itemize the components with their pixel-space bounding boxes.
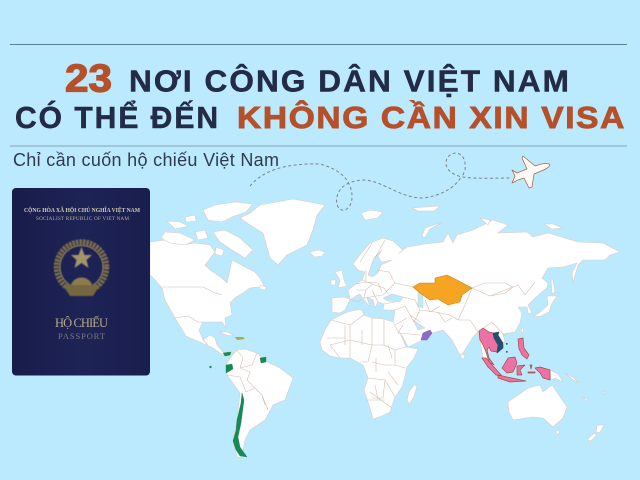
South America	[226, 349, 293, 458]
passport subheading: SOCIALIST REPUBLIC OF VIET NAM	[36, 216, 129, 222]
Baltic Sea	[368, 250, 392, 277]
Borneo	[502, 357, 517, 373]
Sulawesi	[517, 365, 532, 375]
Japan	[533, 296, 557, 317]
Black Sea	[383, 294, 403, 302]
Greenland	[240, 199, 325, 265]
subtitle: Chỉ cần cuốn hộ chiếu Việt Nam	[13, 150, 279, 170]
world map	[150, 199, 620, 458]
Ecuador	[226, 364, 233, 373]
Dominican Republic and Haiti	[235, 337, 245, 340]
Australia	[508, 385, 567, 427]
Caspian Sea	[418, 292, 423, 308]
West Papua and Moluccas	[528, 367, 550, 380]
Sumatra and Java	[482, 358, 526, 382]
Vietnam islands	[506, 343, 508, 353]
Persian Gulf	[413, 320, 425, 330]
title: first line: NƠI CÔNG DÂN VIỆT NAM	[129, 62, 571, 98]
Madagascar	[407, 385, 417, 404]
North and Central America	[150, 240, 265, 356]
Canadian Arctic islands	[161, 202, 266, 290]
Africa	[320, 310, 418, 419]
passport emblem	[56, 242, 106, 296]
Galapagos	[210, 366, 212, 368]
passport	[12, 188, 150, 376]
Arctic islands of Russia	[361, 206, 562, 238]
Cuba	[220, 332, 234, 336]
highlighted countries: Latin America	[210, 352, 266, 457]
Sakhalin	[551, 279, 555, 294]
Tasmania	[555, 431, 560, 435]
Eurasia	[332, 220, 620, 367]
title: number 23: 23	[65, 58, 112, 100]
passport cover	[12, 188, 150, 376]
title: second line start: CÓ THỂ ĐẾN	[15, 99, 220, 135]
passport title: HỘ CHIẾU	[55, 315, 108, 330]
Iceland	[310, 250, 325, 257]
highlighted country: Kazakhstan	[413, 275, 472, 305]
highlighted country: Oman	[421, 330, 432, 340]
title: highlighted text: KHÔNG CẦN XIN VISA	[237, 99, 626, 135]
passport heading: CỘNG HÒA XÃ HỘI CHỦ NGHĨA VIỆT NAM	[24, 206, 140, 214]
Myanmar, Thailand, Laos, Cambodia	[479, 328, 498, 365]
highlighted country: Vietnam	[493, 332, 503, 353]
Philippines	[518, 338, 529, 359]
dashed flight path	[250, 153, 510, 210]
Papua New Guinea and Pacific islands	[550, 370, 606, 401]
country borders	[163, 240, 535, 410]
highlighted countries: Southeast Asia	[479, 328, 550, 382]
Panama	[223, 352, 231, 356]
Chile	[233, 393, 247, 457]
icon: airplane	[512, 156, 550, 188]
Sri Lanka and Taiwan	[461, 328, 524, 359]
title	[15, 58, 626, 135]
passport subtitle: PASSPORT	[58, 331, 106, 341]
New Zealand	[587, 425, 604, 441]
Great Britain and Ireland	[331, 270, 347, 288]
Suriname	[260, 357, 266, 363]
